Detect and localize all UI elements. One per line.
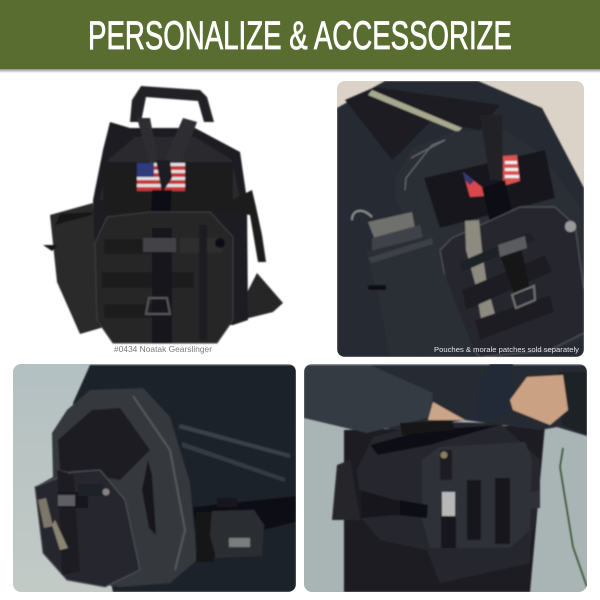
belt pouch at side <box>332 460 360 520</box>
water bottle <box>352 211 424 252</box>
flashlight <box>465 220 496 319</box>
header banner <box>0 0 600 73</box>
product photo of bag <box>43 86 283 343</box>
waist view scene <box>304 364 587 592</box>
waist bag <box>357 422 540 583</box>
belt pouch <box>196 498 264 562</box>
worn bag scene <box>337 81 584 357</box>
side view scene <box>35 365 296 592</box>
flashlight <box>38 498 53 528</box>
flag patches on bag <box>463 155 520 197</box>
hand <box>510 375 568 425</box>
side bottle pocket <box>372 238 475 351</box>
flag patch <box>137 160 185 193</box>
panel: photo of man wearing bag on his back <box>337 81 584 357</box>
strap <box>489 364 514 366</box>
panel: product shot of backpack <box>43 86 283 343</box>
panel: side view of bag worn on chest <box>13 364 296 592</box>
wrist <box>428 402 465 420</box>
logo patch <box>143 238 176 252</box>
photo note: Pouches & morale patches sold separately <box>434 345 579 354</box>
logo patch <box>498 236 527 257</box>
logo patch <box>58 495 75 506</box>
product caption: #0434 Noatak Gearslinger <box>114 344 212 354</box>
panel: bag worn at waist <box>304 364 587 592</box>
